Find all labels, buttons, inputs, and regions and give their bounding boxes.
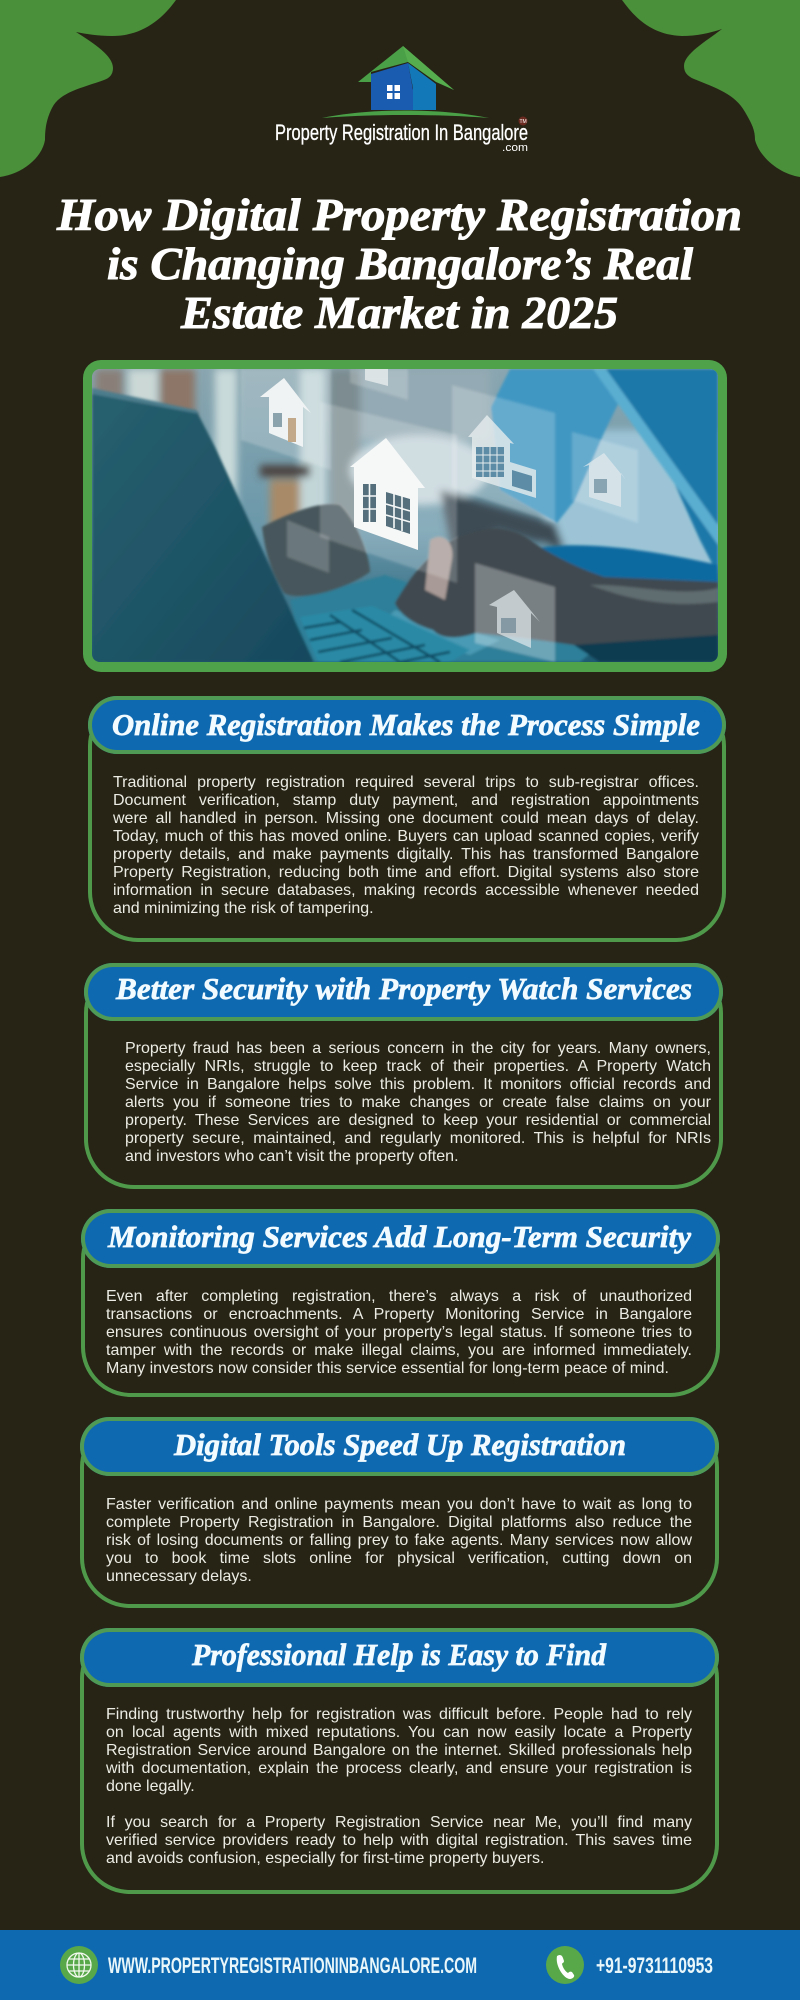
icon: top cropped house bbox=[365, 369, 388, 386]
text block: property watch: alerts you if someone tries to make changes or create false claims on your bbox=[125, 1094, 711, 1111]
text block: online registration bbox=[113, 774, 699, 917]
text block: professional help: on local agents with mixed reputations. You can now easily locate a Property bbox=[106, 1724, 692, 1741]
text block: monitoring services: ensures continuous oversight of your property’s legal status. If someone tries to bbox=[106, 1324, 692, 1341]
left hand bbox=[262, 504, 370, 596]
heading: monitoring services bbox=[81, 1209, 720, 1268]
text block: online registration: Today, much of this has moved online. Buyers can upload scanned copies, verify bbox=[113, 828, 699, 845]
text block: professional help: verified service providers ready to help with digital registration. This saves time bbox=[106, 1832, 692, 1849]
text block: professional help: with documentation, explain the process clearly, and ensure your registration is bbox=[106, 1760, 692, 1777]
floating translucent panels bbox=[241, 369, 638, 662]
title bbox=[56, 190, 742, 338]
text block: monitoring services bbox=[106, 1288, 692, 1377]
text block: online registration: Traditional property registration required several trips to sub-registrar offices. bbox=[113, 774, 699, 791]
title: How Digital Property Registration bbox=[56, 190, 742, 240]
text block: monitoring services: tamper with the records or make illegal claims, you are informed immediately. bbox=[106, 1342, 692, 1359]
heading: professional help bbox=[80, 1628, 719, 1687]
website url: WWW.PROPERTYREGISTRATIONINBANGALORE.COM bbox=[108, 1953, 477, 1978]
text block: online registration: property details, and make payments digitally. This has transformed Bangalore bbox=[113, 846, 699, 863]
text block: online registration: and minimizing the risk of tampering. bbox=[113, 900, 374, 917]
logo bbox=[275, 46, 528, 154]
text block: professional help: done legally. bbox=[106, 1778, 195, 1795]
footer contact bar bbox=[0, 1930, 800, 2000]
text block: monitoring services: Even after completing registration, there’s always a risk of unauthorized bbox=[106, 1288, 692, 1305]
heading: professional help: Professional Help is Easy to Find bbox=[191, 1637, 606, 1672]
panel: property watch bbox=[84, 963, 723, 1189]
text block: digital tools: complete Property Registration in Bangalore. Digital platforms also reduce the bbox=[106, 1514, 692, 1531]
icon: main house bbox=[350, 438, 425, 550]
text block: property watch: Property fraud has been a serious concern in the city for years. Many owners, bbox=[125, 1040, 711, 1057]
text block: online registration: Document verification, stamp duty payment, and registration appointments bbox=[113, 792, 699, 809]
logo wordmark: Property Registration In Bangalore bbox=[275, 120, 528, 145]
text block: digital tools: Faster verification and online payments mean you don’t have to wait as long to bbox=[106, 1496, 692, 1513]
text block: professional help: Registration Service around Bangalore on the internet. Skilled professionals help bbox=[106, 1742, 692, 1759]
text block: property watch: property secure, maintained, and regularly monitored. This is helpful for NRIs bbox=[125, 1130, 711, 1147]
heading: monitoring services: Monitoring Services Add Long-Term Security bbox=[107, 1219, 691, 1254]
desk and keyboard bbox=[290, 575, 600, 662]
text block: monitoring services: Many investors now consider this service essential for long-term peace of mind. bbox=[106, 1360, 669, 1377]
text block: property watch: especially NRIs, struggle to keep track of their properties. A Property Watch bbox=[125, 1058, 711, 1075]
pale background right bbox=[540, 430, 718, 570]
icon: right house bbox=[583, 453, 626, 507]
text block: property watch: property. These Services are designed to keep your residential or commercial bbox=[125, 1112, 711, 1129]
top right green corner bbox=[622, 0, 800, 177]
text block: property watch: Service in Bangalore helps solve this problem. It monitors official records and bbox=[125, 1076, 711, 1093]
title: Estate Market in 2025 bbox=[180, 288, 618, 338]
text block: property watch bbox=[125, 1040, 711, 1165]
icon: phone bbox=[546, 1946, 584, 1984]
hero photo: laptop with floating houses bbox=[83, 360, 727, 672]
text block: digital tools: risk of losing documents or falling prey to fake agents. Many services now allow bbox=[106, 1532, 692, 1549]
text block: digital tools: unnecessary delays. bbox=[106, 1568, 252, 1585]
icon: bottom house bbox=[489, 590, 540, 648]
text block: digital tools bbox=[106, 1496, 692, 1585]
panel: monitoring services bbox=[81, 1209, 720, 1397]
text block: professional help: If you search for a Property Registration Service near Me, you’ll find many bbox=[106, 1814, 692, 1831]
logo domain suffix: .com bbox=[502, 142, 528, 154]
laptop screen bbox=[92, 390, 314, 662]
text block: digital tools: you to book time slots online for physical verification, cutting down on bbox=[106, 1550, 692, 1567]
icon: globe bbox=[60, 1946, 98, 1984]
phone number: +91-9731110953 bbox=[596, 1953, 713, 1978]
right hand and arm bbox=[395, 528, 718, 645]
shirt bbox=[491, 369, 718, 590]
text block: professional help bbox=[106, 1706, 692, 1867]
panel: online registration bbox=[88, 696, 726, 942]
heading: digital tools bbox=[80, 1417, 719, 1476]
trademark badge: TM bbox=[520, 119, 527, 125]
text block: online registration: Property Registration, reducing both time and effort. Digital systems also store bbox=[113, 864, 699, 881]
icon: wide house bbox=[468, 415, 536, 498]
heading: property watch: Better Security with Property Watch Services bbox=[115, 971, 692, 1006]
trademark badge bbox=[518, 116, 528, 126]
panel: professional help bbox=[80, 1628, 719, 1894]
header artwork: corners, logo and title bbox=[0, 0, 800, 338]
icon: house bbox=[322, 46, 489, 118]
top left green corner bbox=[0, 0, 176, 177]
title: is Changing Bangalore’s Real bbox=[107, 239, 694, 289]
heading: property watch bbox=[84, 963, 723, 1021]
icon: small top house bbox=[260, 378, 311, 447]
text block: property watch: and investors who can’t visit the property often. bbox=[125, 1148, 459, 1165]
text block: monitoring services: transactions or encroachments. A Property Monitoring Service in Bangalore bbox=[106, 1306, 692, 1323]
heading: digital tools: Digital Tools Speed Up Registration bbox=[173, 1427, 626, 1462]
heading: online registration: Online Registration Makes the Process Simple bbox=[112, 707, 700, 742]
text block: online registration: were all handled in person. Missing one document could mean days of delay. bbox=[113, 810, 699, 827]
heading: online registration bbox=[88, 696, 726, 754]
text block: professional help: Finding trustworthy help for registration was difficult before. People had to rely bbox=[106, 1706, 692, 1723]
text block: online registration: information in secure databases, making records accessible whenever needed bbox=[113, 882, 699, 899]
panel: digital tools bbox=[80, 1417, 719, 1608]
text block: professional help: and avoids confusion, especially for first-time property buyers. bbox=[106, 1850, 544, 1867]
